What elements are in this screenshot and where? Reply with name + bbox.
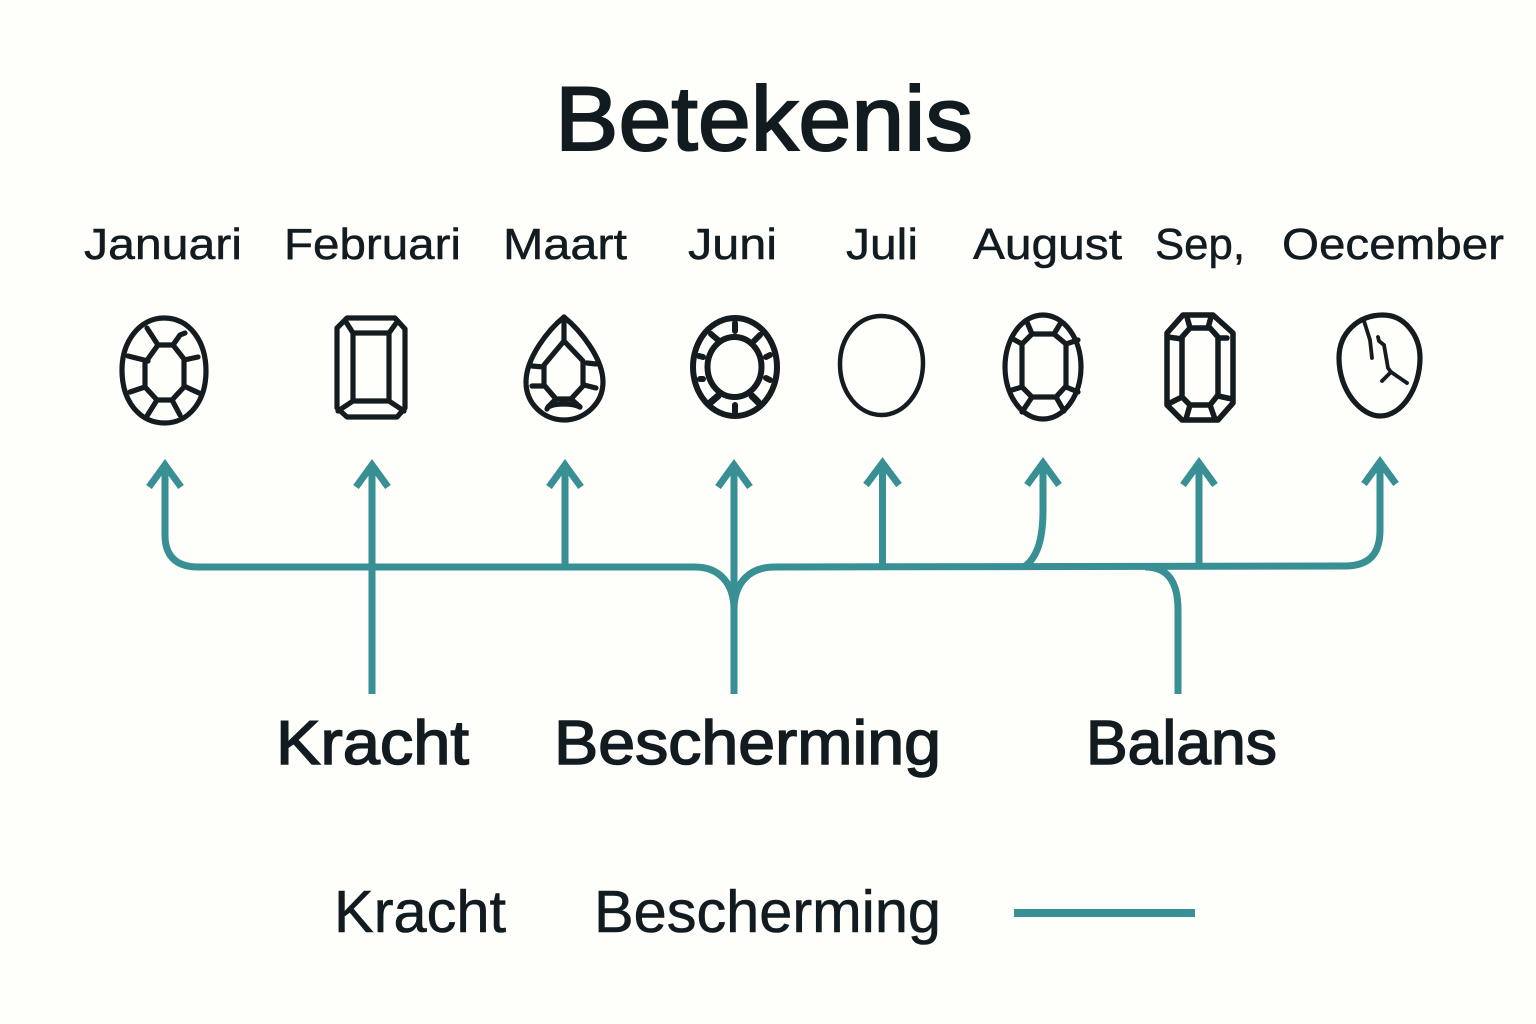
category labels [276, 709, 1277, 778]
label: Februari: Februari [284, 220, 461, 269]
category: Bescherming: Bescherming [554, 709, 941, 778]
arrowhead: Maart [549, 465, 581, 487]
arrow: Oecember branch [734, 464, 1380, 610]
label: August: August [973, 220, 1122, 269]
month labels [84, 220, 1504, 269]
title: Betekenis [555, 69, 973, 170]
label: Juli: Juli [846, 220, 918, 269]
icon: pear gem March [526, 317, 603, 420]
icon: plain round gem July [840, 316, 923, 415]
arrow: September stem [1196, 464, 1202, 566]
arrow: Balans stem [1145, 567, 1178, 694]
arrowheads [149, 462, 1396, 487]
arrow: Juni stem [730, 466, 738, 694]
icon: octagonal gem September [1167, 315, 1233, 420]
arrow: Maart stem [562, 466, 568, 567]
icon: emerald-cut gem February [337, 318, 405, 417]
legend label: Bescherming: Bescherming [594, 879, 941, 945]
arrowhead: Oecember [1364, 462, 1396, 484]
legend [334, 879, 1195, 945]
label: Januari: Januari [84, 220, 242, 269]
icon: oval cut gem August [1005, 315, 1081, 419]
arrow: August branch [1024, 464, 1043, 567]
icon: oval gem January [122, 318, 206, 423]
label: Oecember: Oecember [1282, 220, 1504, 269]
legend label: Kracht: Kracht [334, 879, 506, 945]
label: Juni: Juni [688, 220, 777, 269]
label: Maart: Maart [503, 220, 627, 269]
category: Kracht: Kracht [276, 709, 469, 778]
arrowhead: Februari [356, 465, 388, 487]
legend line [1014, 909, 1195, 917]
label: Sep,: Sep, [1155, 220, 1245, 269]
icon: cracked gem December [1339, 315, 1420, 416]
arrowhead: Juni [718, 465, 750, 487]
arrow: Juli stem [879, 464, 886, 567]
arrow: Januari branch [165, 466, 734, 694]
arrowhead: August [1027, 463, 1059, 485]
arrowhead: Juli [866, 463, 899, 485]
icon: round gem with spokes June [693, 318, 777, 416]
arrowhead: September [1183, 463, 1215, 485]
arrowhead: Januari [149, 465, 181, 487]
arrow: Februari stem [368, 466, 376, 694]
arrows network [149, 462, 1396, 694]
category: Balans: Balans [1086, 709, 1277, 778]
